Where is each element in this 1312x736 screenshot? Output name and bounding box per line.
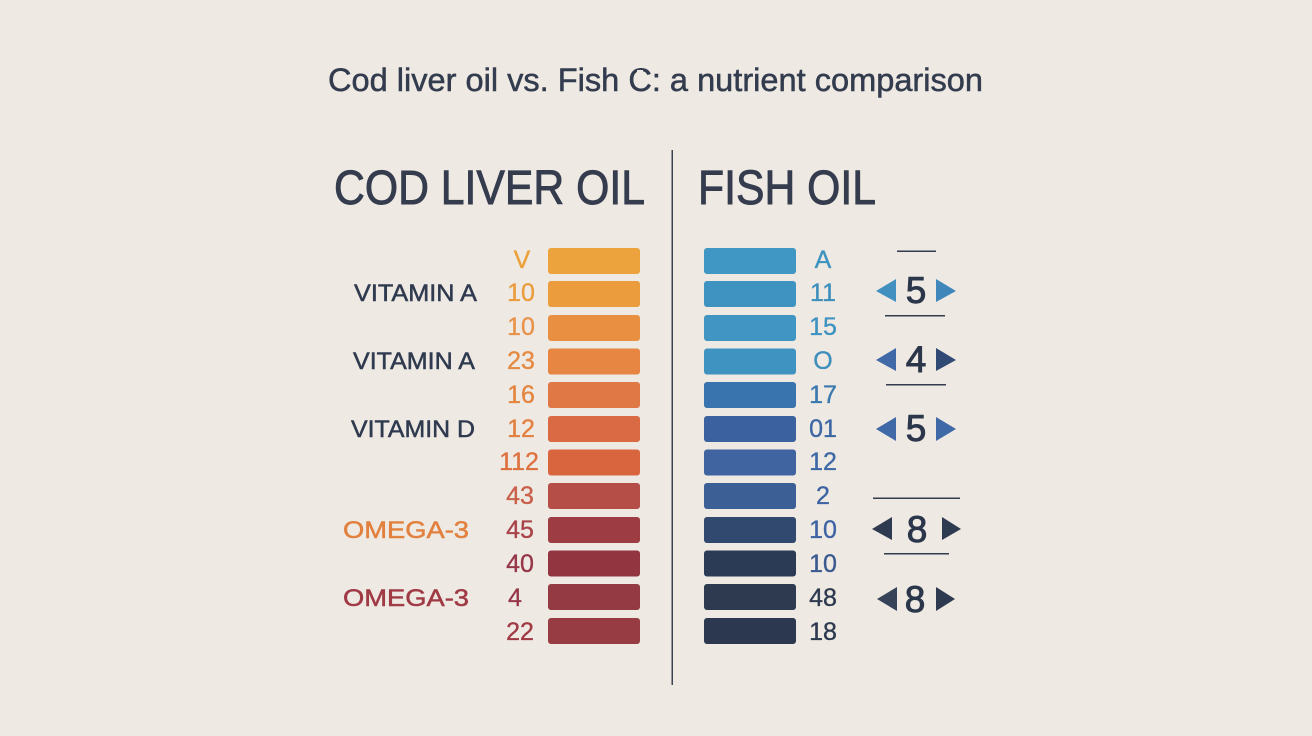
difference indicator: 4: 4 — [906, 339, 926, 380]
center divider — [672, 150, 673, 685]
panel: cod liver oil values: 23 — [507, 347, 535, 375]
panel: fish oil values: 11 — [810, 279, 836, 307]
panel: cod liver oil nutrient labels: VITAMIN A — [354, 280, 477, 307]
difference indicator: 5 — [876, 408, 956, 449]
difference indicator: 4 — [876, 339, 956, 386]
panel: cod liver oil values: 45 — [506, 516, 534, 544]
panel: cod liver oil values: 4 — [508, 584, 522, 612]
panel: fish oil values: O — [813, 347, 833, 375]
difference indicator: 5: 5 — [906, 270, 926, 311]
difference indicator: 8 — [872, 498, 961, 554]
panel: cod liver oil values: 43 — [506, 482, 534, 510]
panel: cod liver oil values: 10 — [507, 279, 535, 307]
heading: cod liver oil: COD LIVER OIL — [334, 162, 645, 215]
difference indicator: 8: 8 — [905, 579, 925, 620]
panel: fish oil values: 17 — [809, 381, 837, 409]
panel: cod liver oil nutrient labels: OMEGA-3 — [343, 585, 469, 612]
panel: fish oil values: 2 — [816, 482, 830, 510]
panel: fish oil values: 10 — [809, 550, 837, 578]
panel: cod liver oil values: 22 — [506, 618, 534, 646]
panel: cod liver oil values: 40 — [506, 550, 534, 578]
panel: cod liver oil values — [499, 246, 539, 646]
heading: fish oil: FISH OIL — [698, 162, 876, 215]
panel: fish oil values: 18 — [809, 618, 837, 646]
panel: fish oil values: A — [815, 246, 832, 274]
panel: cod liver oil values: V — [514, 246, 531, 274]
difference indicator: 8: 8 — [907, 509, 927, 550]
difference indicator: 5 — [876, 250, 956, 316]
panel: cod liver oil nutrient labels: VITAMIN D — [351, 416, 475, 443]
panel: fish oil values: 12 — [809, 448, 837, 476]
panel: cod liver oil values: 112 — [499, 448, 539, 476]
panel: cod liver oil nutrient labels — [343, 280, 477, 612]
panel: cod liver oil values: 10 — [507, 313, 535, 341]
panel: cod liver oil bars — [548, 248, 640, 644]
panel: fish oil values: 15 — [809, 313, 837, 341]
panel: cod liver oil values: 16 — [507, 381, 535, 409]
panel: fish oil bars — [704, 248, 796, 644]
panel: cod liver oil values: 12 — [507, 415, 535, 443]
difference indicator: 8 — [877, 579, 955, 620]
panel: fish oil values: 48 — [809, 584, 837, 612]
panel: fish oil values — [809, 246, 837, 646]
panel: fish oil values: 01 — [809, 415, 837, 443]
panel: cod liver oil nutrient labels: OMEGA-3 — [343, 517, 469, 544]
panel: fish oil values: 10 — [809, 516, 837, 544]
title: Cod liver oil vs. Fish C: a nutrient comparison — [328, 62, 983, 98]
panel: cod liver oil nutrient labels: VITAMIN A — [353, 348, 475, 375]
difference indicator: 5: 5 — [906, 408, 926, 449]
